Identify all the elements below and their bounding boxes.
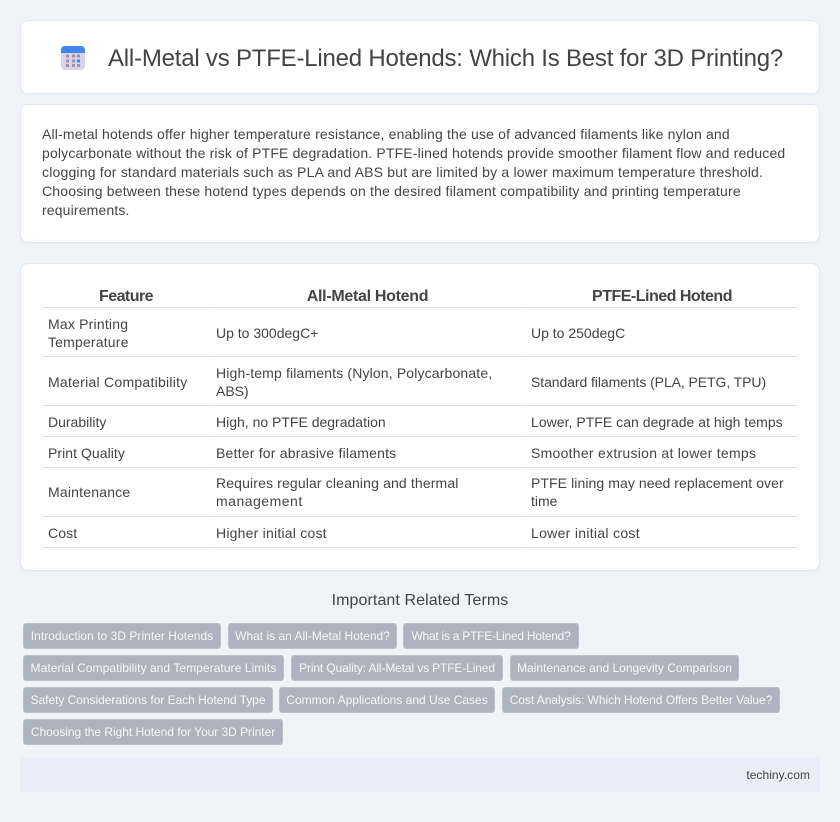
tag	[291, 655, 503, 681]
table header: All-Metal Hotend	[307, 288, 428, 305]
row: max printing temperature: Up to 300degC+	[216, 325, 318, 341]
row: maintenance: management	[216, 493, 303, 509]
row: print quality: Smoother extrusion at lower temps	[531, 445, 756, 461]
tag	[23, 687, 273, 713]
heading: related terms: Important Related Terms	[332, 592, 508, 609]
tag	[228, 623, 397, 649]
row: maintenance	[48, 475, 784, 509]
tag: Material Compatibility and Temperature Limits	[31, 661, 276, 675]
row: print quality: Print Quality	[48, 445, 125, 461]
row: max printing temperature	[48, 316, 625, 350]
summary text: Choosing between these hotend types depends on the desired filament compatibility and printing temperature	[42, 183, 741, 199]
row: maintenance: Requires regular cleaning and thermal	[216, 475, 459, 491]
tag	[23, 655, 284, 681]
row: durability: High, no PTFE degradation	[216, 414, 386, 430]
panel: title header	[20, 20, 820, 94]
tag: Common Applications and Use Cases	[286, 693, 488, 707]
summary text: polycarbonate without the risk of PTFE degradation. PTFE-lined hotends provide smoother filament flow and reduced	[42, 145, 785, 161]
tag	[279, 687, 495, 713]
table header: Feature	[99, 288, 153, 305]
row: material compatibility: Material Compatibility	[48, 374, 188, 390]
tag	[23, 719, 283, 745]
row: maintenance: PTFE lining may need replacement over	[531, 475, 784, 491]
tag: What is a PTFE-Lined Hotend?	[411, 629, 571, 643]
summary text: requirements.	[42, 202, 130, 218]
summary text	[42, 126, 785, 218]
row: cost: Cost	[48, 525, 77, 541]
tag: Choosing the Right Hotend for Your 3D Printer	[31, 725, 275, 739]
row: durability: Durability	[48, 414, 106, 430]
row: material compatibility	[48, 365, 766, 399]
table header: PTFE-Lined Hotend	[592, 288, 732, 305]
row: max printing temperature: Temperature	[48, 334, 129, 350]
row: durability	[48, 414, 783, 430]
comparison table	[43, 288, 797, 548]
row: max printing temperature: Max Printing	[48, 316, 128, 332]
tag	[510, 655, 739, 681]
tag: Cost Analysis: Which Hotend Offers Better Value?	[510, 693, 772, 707]
row: maintenance: time	[531, 493, 557, 509]
footer bar	[20, 758, 820, 792]
row: material compatibility: High-temp filaments (Nylon, Polycarbonate,	[216, 365, 492, 381]
row: cost: Higher initial cost	[216, 525, 327, 541]
row: print quality: Better for abrasive filaments	[216, 445, 396, 461]
panel: comparison table	[20, 263, 820, 571]
tag: What is an All-Metal Hotend?	[235, 629, 390, 643]
tag	[403, 623, 579, 649]
row: maintenance: Maintenance	[48, 484, 130, 500]
row: cost: Lower initial cost	[531, 525, 640, 541]
related term tags	[23, 623, 780, 745]
panel: summary	[20, 104, 820, 243]
footer source: techiny.com	[746, 768, 810, 782]
summary text: All-metal hotends offer higher temperature resistance, enabling the use of advanced filaments like nylon and	[42, 126, 730, 142]
tag: Safety Considerations for Each Hotend Type	[31, 693, 265, 707]
summary text: clogging for standard materials such as PLA and ABS but are limited by a lower maximum temperature threshold.	[42, 164, 763, 180]
icon: calendar	[61, 46, 85, 70]
row: print quality	[48, 445, 756, 461]
row: max printing temperature: Up to 250degC	[531, 325, 625, 341]
tag: Print Quality: All-Metal vs PTFE-Lined	[299, 661, 495, 675]
tag	[23, 623, 221, 649]
tag: Introduction to 3D Printer Hotends	[31, 629, 213, 643]
title: All-Metal vs PTFE-Lined Hotends: Which Is Best for 3D Printing?	[108, 45, 783, 72]
tag	[502, 687, 780, 713]
row: durability: Lower, PTFE can degrade at high temps	[531, 414, 783, 430]
row: material compatibility: Standard filaments (PLA, PETG, TPU)	[531, 374, 766, 390]
tag: Maintenance and Longevity Comparison	[517, 661, 732, 675]
table header	[99, 288, 732, 305]
row: material compatibility: ABS)	[216, 383, 249, 399]
row: cost	[48, 525, 640, 541]
